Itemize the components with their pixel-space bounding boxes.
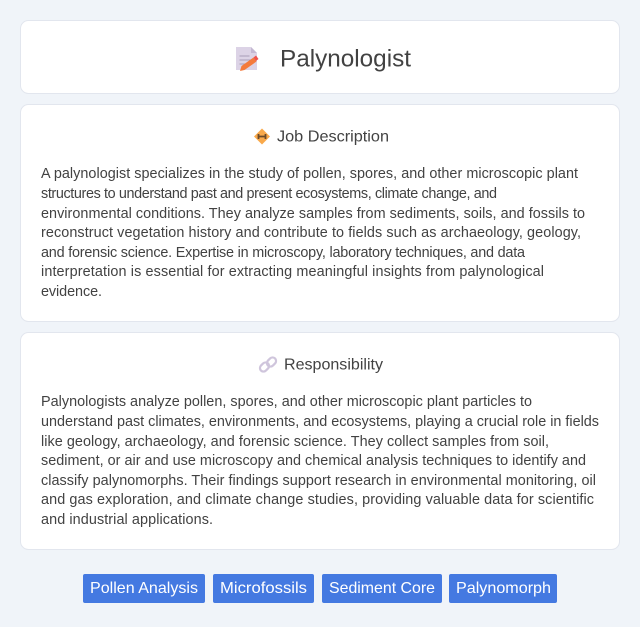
text block: job description: interpretation is essential for extracting meaningful insights from palynological: [41, 264, 544, 280]
tag: sediment core: Sediment Core: [329, 580, 435, 597]
text block: job description: environmental conditions. They analyze samples from sediments, soils, and fossils to: [41, 206, 585, 222]
panel: job description: [20, 104, 620, 322]
tag: palynomorph: [449, 574, 557, 603]
text block: job description: reconstruct vegetation history and contribute to fields such as archaeology, geology,: [41, 225, 581, 241]
tag: microfossils: [213, 574, 314, 603]
tag row: [83, 574, 557, 603]
icon: orange diamond: [254, 128, 270, 144]
tag: microfossils: Microfossils: [220, 580, 307, 597]
text block: responsibility: classify palynomorphs. Their findings support research in environmental monitoring, oil: [41, 473, 596, 489]
text block: job description: structures to understand past and present ecosystems, climate change, and: [41, 186, 497, 202]
tag: pollen analysis: [83, 574, 205, 603]
text block: responsibility: sediment, or air and use microscopy and chemical analysis techniques to identify and: [41, 453, 586, 469]
panel: title card: [20, 20, 620, 94]
tag: pollen analysis: Pollen Analysis: [90, 580, 198, 597]
title: Palynologist: [280, 46, 411, 72]
text block: responsibility: [41, 394, 599, 528]
panel: responsibility: [20, 332, 620, 550]
icon: document with pencil: [236, 47, 258, 71]
text block: job description: evidence.: [41, 284, 102, 300]
icon: chain link: [258, 356, 278, 373]
tag: palynomorph: Palynomorph: [456, 580, 551, 597]
heading: job description: Job Description: [277, 128, 389, 146]
text block: responsibility: like geology, archaeology, and forensic science. They collect samples from soil,: [41, 434, 549, 450]
text block: job description: A palynologist specializes in the study of pollen, spores, and other microscopic plant: [41, 166, 578, 182]
heading: responsibility: Responsibility: [284, 356, 383, 374]
text block: responsibility: understand past climates, environments, and ecosystems, playing a crucial role in fields: [41, 414, 599, 430]
text block: job description: [41, 166, 585, 300]
text block: responsibility: and industrial applications.: [41, 512, 213, 528]
text block: job description: and forensic science. Expertise in microscopy, laboratory techniques, and data: [41, 245, 525, 261]
text block: responsibility: and gas exploration, and climate change studies, providing valuable data for scientific: [41, 492, 594, 508]
text block: responsibility: Palynologists analyze pollen, spores, and other microscopic plant particles to: [41, 394, 532, 410]
tag: sediment core: [322, 574, 442, 603]
